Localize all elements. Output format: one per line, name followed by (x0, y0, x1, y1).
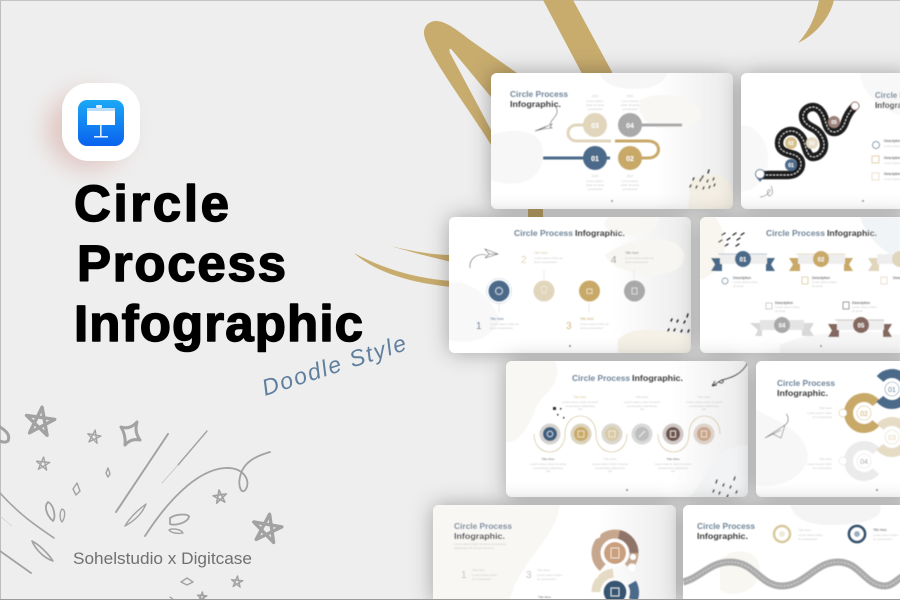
panel: slide 1 timeline (491, 73, 734, 209)
panel: slide 2 winding road (741, 73, 900, 209)
captions: Lorem ipsum dolor (807, 411, 832, 415)
panel: slide 3 four steps: Lorem ipsum dolor sit (490, 322, 519, 326)
icon: paper plane (470, 249, 498, 268)
captions: Lorem ipsum dolor (807, 462, 832, 466)
small white dots (628, 564, 636, 572)
panel: slide 2 winding road: 05 (831, 120, 837, 126)
captions (530, 395, 722, 473)
ribbon 01 (711, 251, 775, 271)
panel: slide 7 cropped rings: Title Here (472, 568, 485, 572)
captions: Lorem ipsum (621, 99, 639, 103)
panel: slide 1 timeline: 02 (626, 156, 634, 163)
captions: consectetur (587, 187, 603, 191)
captions: Lorem ipsum dolor sit amet (562, 400, 598, 404)
captions: consectetur adipiscing (658, 466, 688, 470)
panel: slide 7 cropped rings: sit consectetur (472, 577, 491, 581)
doodle arrow (712, 362, 748, 386)
panel: slide 3 four steps: Lorem ipsum dolor sit (580, 322, 609, 326)
road lines (543, 125, 682, 158)
captions: 2027 (627, 174, 634, 178)
panel: slide 4 ribbons: Description (775, 301, 793, 305)
panel: slide 3 four steps: 4 (611, 255, 617, 266)
captions: elit (578, 407, 582, 411)
panel: slide 6 rings: Infographic. (777, 389, 828, 398)
slide title: Circle Process (766, 228, 825, 238)
captions: Lorem ipsum dolor sit amet (530, 462, 566, 466)
captions: consectetur adipiscing (595, 466, 625, 470)
title: Infographic (74, 295, 363, 352)
panel: slide 6 rings: 03 (888, 435, 896, 442)
panel: slide 1 timeline: 04 (626, 123, 634, 130)
rain marks (668, 314, 689, 332)
captions: Lorem ipsum dolor sit amet (655, 462, 691, 466)
ribbon 02: 02 (818, 258, 825, 264)
captions: Title Here (542, 457, 555, 461)
ring 02 (842, 391, 886, 435)
panel: slide 8 wavy road: sit consectetur (873, 537, 892, 541)
panel: slide 4 ribbons: sit amet (812, 284, 823, 288)
captions: consectetur (587, 107, 603, 111)
title: Circle (74, 175, 229, 232)
ring 04 (842, 439, 886, 483)
panel: slide 2 winding road: 03 (809, 141, 815, 147)
panel: slide 1 timeline: Infographic. (510, 100, 561, 109)
doodle sparkles and drops (0, 422, 193, 585)
panel: slide 6 rings (756, 361, 900, 497)
description list (872, 142, 880, 148)
captions: Lorem ipsum (586, 179, 604, 183)
panel: slide 7 cropped rings: Title Here (537, 568, 550, 572)
panel: slide 3 four steps: 3 (566, 321, 572, 332)
panel: slide 3 four steps: amet consectetur (534, 260, 557, 264)
captions: consectetur (622, 107, 638, 111)
bottom ring (596, 573, 635, 600)
captions: dolor sit amet (586, 103, 604, 107)
captions: 2026 (592, 174, 599, 178)
panel: slide 4 ribbons: sit amet (775, 309, 786, 313)
process circles (540, 424, 714, 444)
panel: slide 7 cropped rings: Infographic. (454, 532, 505, 541)
panel: slide 7 cropped rings: Title Here (538, 595, 551, 599)
panel: slide 4 ribbons: sit amet (733, 284, 744, 288)
ribbon 01: 01 (740, 258, 747, 264)
captions: 2025 (627, 94, 634, 98)
captions: consectetur adipiscing (533, 466, 563, 470)
captions (586, 94, 639, 191)
panel: slide 4 ribbons: Infographic. (827, 228, 877, 238)
captions: consectetur adipiscing (689, 404, 719, 408)
panel: slide 8 wavy road (683, 505, 900, 600)
subtitle: Doodle Style: Doodle Style (259, 330, 409, 401)
step captions: 1 (461, 570, 467, 581)
captions: elit (608, 469, 612, 473)
panel: slide 4 ribbons: sit amet (852, 309, 863, 313)
captions: 2023 (592, 94, 599, 98)
captions: Title Here (667, 457, 680, 461)
panel: slide 7 cropped rings: adipiscing elit sed do eiusmod (454, 546, 494, 550)
panel: slide 4 ribbons (700, 217, 900, 353)
road stops (785, 159, 797, 171)
slide title: Circle Process (510, 90, 569, 99)
panel: slide 2 winding road: 01 (788, 163, 794, 169)
credit: Sohelstudio x Digitcase (73, 549, 252, 568)
panel: slide 3 four steps: Lorem ipsum dolor sit (625, 256, 654, 260)
captions: elit (546, 469, 550, 473)
rain marks (713, 477, 737, 497)
ribbon 05 (828, 317, 892, 337)
captions: elit (640, 407, 644, 411)
doodle decorations (0, 405, 284, 600)
captions: Lorem ipsum (621, 179, 639, 183)
captions: sit consectetur (813, 466, 832, 470)
panel: slide 4 ribbons: Description (852, 301, 870, 305)
panel: slide 3 four steps: amet consectetur (490, 326, 513, 330)
panel: slide 8 wavy road: Lorem ipsum dolor (873, 533, 898, 537)
pin blue (849, 526, 865, 542)
gold brush swooshes (354, 0, 834, 287)
pin gold (774, 526, 790, 542)
panel: slide 6 rings: 01 (888, 387, 896, 394)
panel: slide 5 six circles: Infographic. (632, 373, 683, 383)
panel: slide 3 four steps: Title Here (534, 251, 548, 255)
panel: slide 8 wavy road: Lorem ipsum dolor (798, 533, 823, 537)
ring 03 (870, 415, 900, 459)
slide title: Circle Process (697, 522, 755, 531)
panel: slide 5 six circles (506, 361, 748, 497)
panel: slide 3 four steps: Title Here (625, 251, 639, 255)
panel: slide 7 cropped rings: sit consectetur (537, 577, 556, 581)
slide title: Circle Process (572, 373, 630, 383)
panel: slide 3 four steps: amet consectetur (625, 260, 648, 264)
captions: dolor sit amet (586, 183, 604, 187)
panel: slide 4 ribbons: Lorem ipsum dolor (812, 280, 837, 284)
captions: Title Here (604, 457, 617, 461)
small white dots (839, 409, 847, 417)
panel: slide 7 cropped rings: Lorem ipsum dolor sit amet consectetur (454, 542, 507, 546)
wave connector (534, 416, 720, 452)
panel: slide 1 timeline: 03 (591, 123, 599, 130)
captions: consectetur (622, 187, 638, 191)
slide title: Circle Process (777, 379, 835, 388)
panel: slide 7 cropped rings: Lorem ipsum dolor (472, 573, 497, 577)
captions: Title Here (698, 395, 711, 399)
panel: slide 6 rings: 04 (860, 459, 868, 466)
title: Process (77, 235, 286, 292)
panel: slide 4 ribbons: Lorem ipsum dolor (733, 280, 758, 284)
top ring (588, 526, 642, 580)
captions: Title Here (819, 457, 832, 461)
wavy road (683, 562, 900, 586)
panel: slide 3 four steps: Lorem ipsum dolor sit (534, 256, 563, 260)
captions: Lorem ipsum dolor sit amet (686, 400, 722, 404)
slide title: Circle Process (514, 228, 573, 238)
rain marks (719, 233, 744, 246)
panel: slide 4 ribbons: Description (812, 276, 830, 280)
step captions: Title Here (490, 317, 504, 321)
captions: sit consectetur (813, 415, 832, 419)
captions: Lorem ipsum dolor sit amet (624, 400, 660, 404)
panel: slide 8 wavy road: Infographic. (697, 532, 748, 541)
panel: slide 3 four steps: 2 (521, 255, 527, 266)
panel: slide 4 ribbons: Lorem ipsum dolor (852, 305, 877, 309)
panel: slide 2 winding road: 02 (788, 141, 794, 147)
captions: consectetur adipiscing (627, 404, 657, 408)
captions: Title Here (636, 395, 649, 399)
icon: paper plane (765, 414, 788, 438)
step numbers: 1 (476, 321, 482, 332)
ribbon 05: 05 (858, 324, 865, 330)
panel: slide 1 timeline: 01 (591, 156, 599, 163)
captions: Title Here (574, 395, 587, 399)
panel: slide 8 wavy road: sit consectetur (798, 537, 817, 541)
captions: dolor sit amet (621, 103, 639, 107)
ribbon 04: 04 (779, 324, 786, 330)
captions: elit (671, 469, 675, 473)
step circles (583, 113, 607, 137)
slide title: Circle Process (454, 522, 512, 531)
panel: slide 8 wavy road: Title Here (873, 528, 887, 532)
panel: slide 3 four steps: Title Here (580, 317, 594, 321)
pin captions: Title Here (798, 528, 811, 532)
captions: Lorem ipsum (586, 99, 604, 103)
dots (553, 407, 564, 418)
panel: slide 7 cropped rings: Lorem ipsum dolor (537, 573, 562, 577)
small icons (722, 277, 887, 309)
doodle strokes (0, 431, 270, 600)
pager (611, 200, 613, 202)
ring 01 (870, 367, 900, 411)
captions: Title Here (819, 406, 832, 410)
icon: paper plane (535, 107, 557, 131)
ribbon 03 (868, 251, 900, 271)
panel: slide 3 four steps (449, 217, 691, 353)
captions (807, 406, 832, 470)
captions: consectetur adipiscing (565, 404, 595, 408)
doodle stars (24, 405, 284, 600)
rain marks (690, 170, 715, 189)
step circles (499, 270, 634, 312)
captions: Lorem ipsum dolor sit amet (592, 462, 628, 466)
panel: slide 4 ribbons: Lorem ipsum dolor (775, 305, 800, 309)
ribbon 04 (750, 317, 814, 336)
panel: slide 6 rings: 02 (860, 411, 868, 418)
ribbon 02 (789, 251, 853, 271)
road (759, 107, 854, 175)
captions: elit (702, 407, 706, 411)
panel: slide 7 cropped rings (433, 505, 676, 600)
panel: slide 3 four steps: amet consectetur (580, 326, 603, 330)
title (74, 175, 363, 352)
pins (756, 177, 764, 182)
captions: dolor sit amet (621, 183, 639, 187)
app icon: Keynote (46, 83, 140, 170)
panel: slide 3 four steps: Infographic. (575, 228, 625, 238)
panel: slide 7 cropped rings: 3 (526, 570, 532, 581)
descriptions: Description (733, 276, 751, 280)
